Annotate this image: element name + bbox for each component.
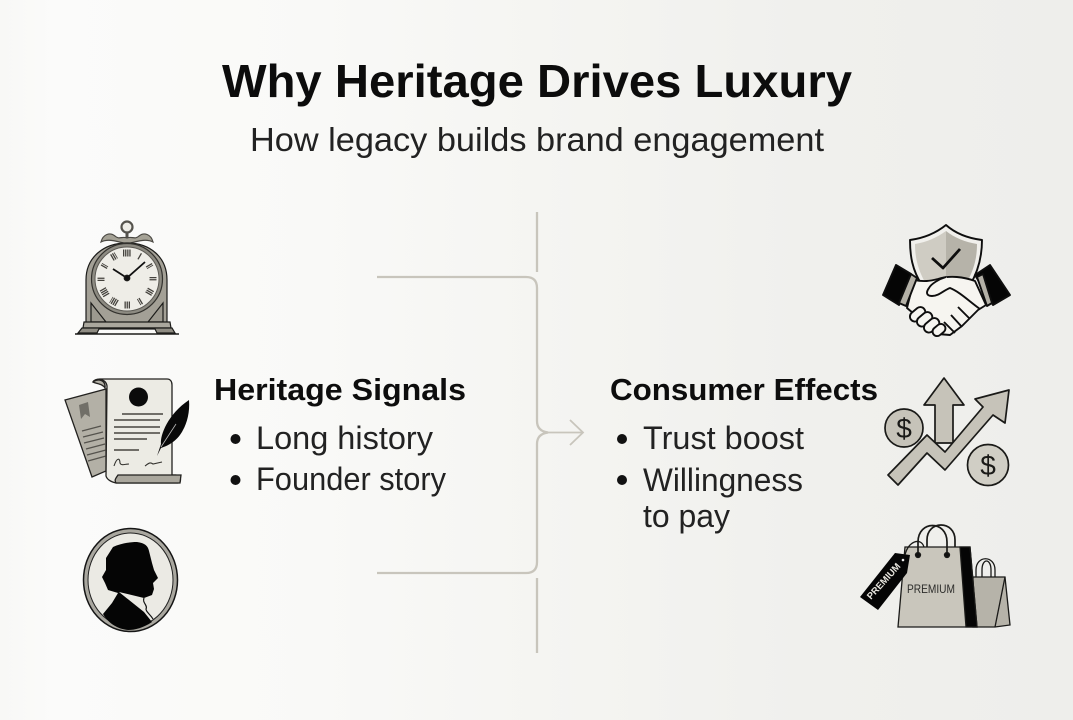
icon: premium shopping bags	[860, 525, 1010, 627]
coin: right dollar: $	[980, 450, 996, 481]
heading: heritage signals: Heritage Signals	[214, 372, 466, 407]
coin: left dollar: $	[896, 413, 912, 444]
wax seal	[129, 388, 148, 406]
bullet list: consumer effects	[617, 420, 804, 534]
panel: consumer effects	[610, 372, 878, 534]
icon: shield and handshake	[883, 225, 1010, 338]
bullet list: heritage signals: Long history	[256, 420, 433, 456]
price tag	[860, 541, 924, 610]
bag label: PREMIUM	[907, 584, 955, 596]
bullet list: heritage signals: Founder story	[256, 461, 446, 497]
bullet list: consumer effects: Trust boost	[643, 420, 804, 456]
clock hands	[113, 262, 145, 278]
icon: founding documents and quill	[65, 379, 189, 483]
bullet list: consumer effects: Willingness	[643, 462, 803, 498]
subtitle: How legacy builds brand engagement	[250, 121, 824, 158]
bracket connector with arrow	[377, 212, 583, 653]
price tag: PREMIUM	[865, 561, 903, 602]
quill	[157, 400, 189, 456]
icon: rising growth arrows and coins	[885, 378, 1009, 486]
icon: antique clock	[75, 222, 179, 334]
bullet list: consumer effects: to pay	[643, 498, 730, 534]
clock numerals	[101, 253, 153, 305]
bullet list: heritage signals	[230, 420, 446, 497]
icon: founder silhouette portrait	[84, 528, 178, 632]
heading: consumer effects: Consumer Effects	[610, 372, 878, 407]
title: Why Heritage Drives Luxury	[222, 55, 852, 107]
panel: heritage signals	[214, 372, 466, 497]
